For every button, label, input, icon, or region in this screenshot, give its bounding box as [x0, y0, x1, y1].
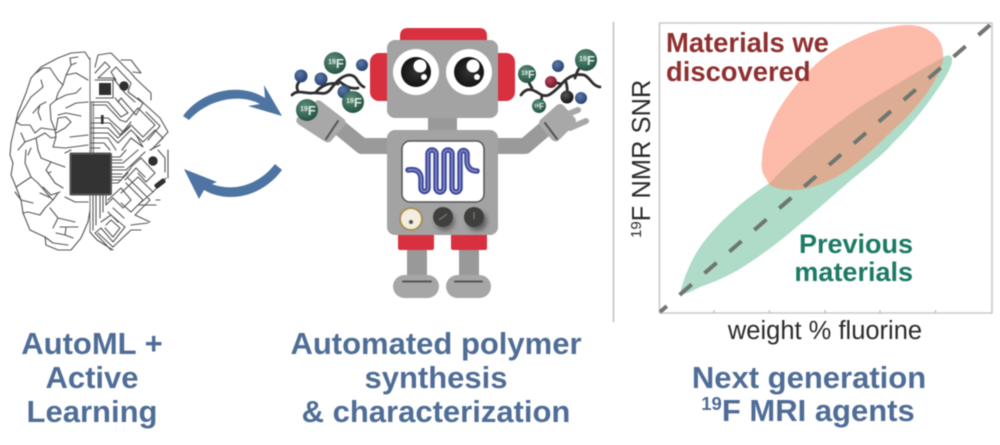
- chart: SNR vs weight % fluorine: [628, 23, 992, 345]
- monomers: [518, 65, 536, 83]
- 19F labels: 19: [300, 106, 308, 113]
- heading: automated polymer synthesis: Automated polymer: [290, 326, 582, 361]
- robot legs: [407, 249, 479, 279]
- 19F labels: 19: [534, 103, 540, 108]
- y axis label: F NMR SNR: [628, 80, 656, 221]
- chart frame: [660, 23, 992, 313]
- robot screen: [402, 141, 484, 202]
- diagonal dashed trend line: [660, 25, 990, 312]
- 19F labels: [300, 56, 362, 118]
- x axis label: weight % fluorine: [727, 317, 922, 345]
- arrow: top cycle arrow: [183, 85, 282, 120]
- heading: next generation MRI agents: 19: [701, 393, 722, 414]
- robot antenna cap: [400, 28, 487, 42]
- heading: AutoML + Active Learning: Learning: [27, 394, 157, 429]
- arrow: bottom cycle arrow: [184, 164, 282, 199]
- label: materials we discovered: discovered: [666, 56, 811, 87]
- 19F labels: 19: [328, 59, 336, 66]
- icon: robot: [296, 28, 586, 298]
- label: materials we discovered: [666, 27, 829, 87]
- 19F labels: F: [308, 103, 316, 118]
- robot gauge dial: [400, 208, 422, 230]
- 19F labels: F: [528, 69, 535, 81]
- robot eyes: [393, 49, 492, 95]
- robot head: [387, 40, 498, 118]
- icon: brain with circuit: [10, 52, 168, 250]
- brain center lines: [90, 58, 94, 232]
- polymer chain: right hand: [518, 49, 600, 113]
- 19F labels: F: [539, 102, 544, 111]
- heading: AutoML + Active Learning: AutoML +: [21, 326, 163, 361]
- 19F labels: F: [336, 56, 344, 71]
- robot foot slots: [403, 280, 482, 282]
- robot arms: [340, 128, 546, 146]
- 19F labels: F: [587, 53, 595, 68]
- flow reactor serpentine: [408, 150, 477, 192]
- 19F labels: [521, 53, 595, 111]
- robot left hand: [296, 100, 346, 142]
- brain left hemisphere outline: [10, 52, 90, 250]
- label: materials we discovered: Materials we: [666, 27, 829, 58]
- circuit traces lower: [90, 145, 168, 250]
- x axis ticks: [714, 310, 936, 313]
- heading: automated polymer synthesis: & characterization: [302, 394, 570, 429]
- robot ears: [370, 53, 515, 101]
- heading: next generation MRI agents: F MRI agents: [722, 393, 915, 428]
- heading: automated polymer synthesis: [290, 326, 582, 429]
- label: previous materials: materials: [794, 257, 913, 287]
- heading: automated polymer synthesis: synthesis: [364, 360, 508, 395]
- blue monomers: [294, 59, 368, 98]
- divider: [612, 22, 614, 322]
- robot neck: [428, 115, 457, 133]
- discovered materials region: [762, 25, 943, 190]
- brain left hemisphere folds: [16, 57, 88, 155]
- heading: next generation MRI agents: Next generation: [692, 360, 926, 395]
- polymer chain: left hand: [292, 52, 368, 121]
- 19F labels: 19: [346, 98, 354, 105]
- robot red hips: [398, 233, 487, 250]
- label: previous materials: [794, 229, 913, 287]
- y axis label: 19: [628, 221, 645, 238]
- previous materials region: [680, 55, 952, 294]
- central processor chip: [71, 154, 110, 194]
- fluorinated monomers: [296, 52, 364, 121]
- robot right hand: [539, 104, 586, 142]
- black components: [99, 81, 166, 189]
- robot body: [387, 130, 498, 235]
- 19F labels: F: [354, 95, 362, 110]
- label: previous materials: Previous: [799, 229, 913, 259]
- 19F labels: 19: [579, 56, 587, 63]
- heading: next generation MRI agents: [692, 360, 926, 428]
- heading: AutoML + Active Learning: Active: [45, 360, 139, 395]
- 19F labels: 19: [521, 71, 529, 77]
- robot feet: [393, 275, 491, 298]
- heading: AutoML + Active Learning: [21, 326, 163, 429]
- robot knobs: [433, 207, 487, 231]
- circuit traces upper: [91, 53, 168, 150]
